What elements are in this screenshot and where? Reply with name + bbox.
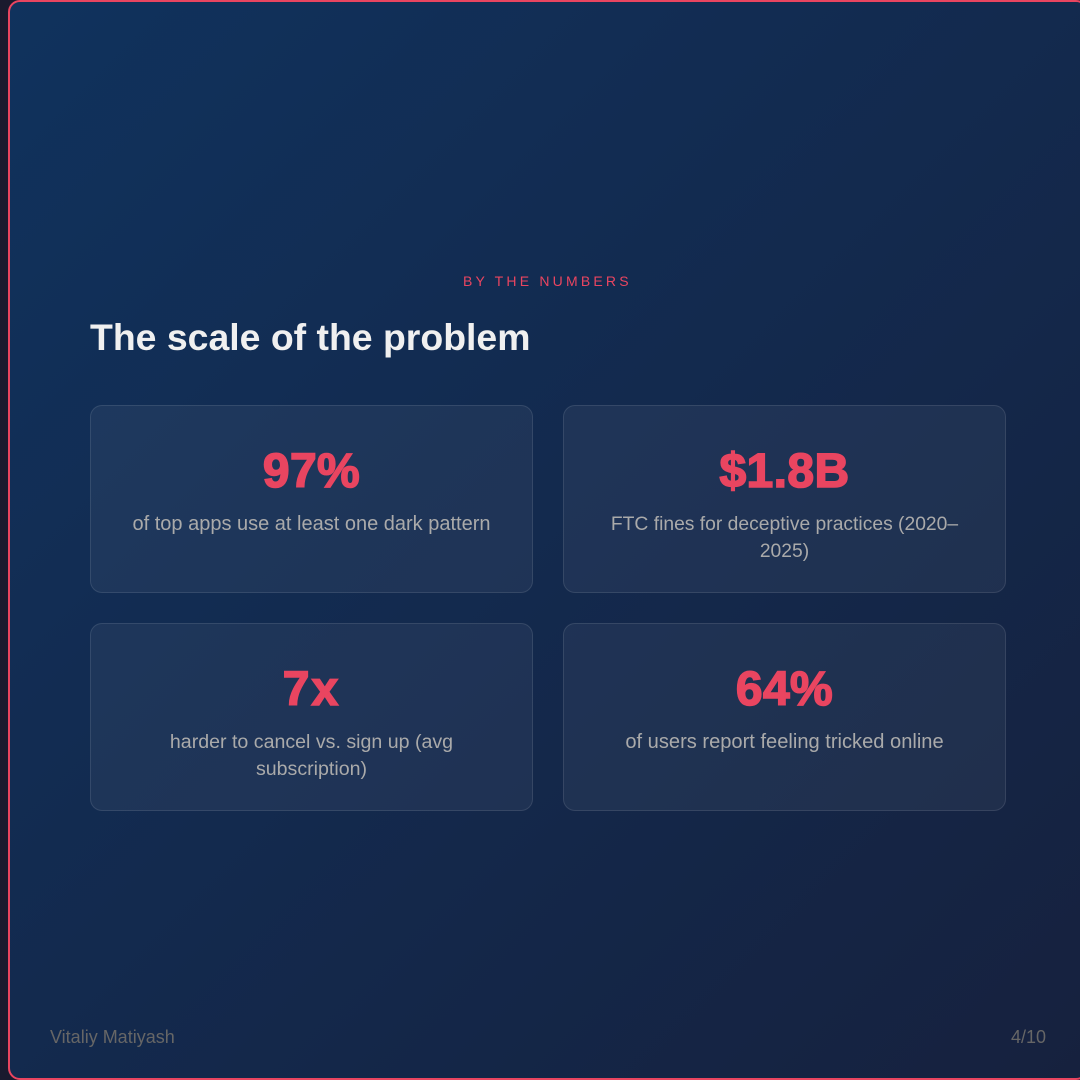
panel: stat 64% xyxy=(563,623,1006,811)
panel: stat $1.8B xyxy=(563,405,1006,593)
panel: stat 7x xyxy=(90,623,533,811)
stat label: harder to cancel: subscription) xyxy=(256,758,367,780)
stat number: 97%: 97% xyxy=(263,445,360,498)
stat label: harder to cancel: harder to cancel vs. sign up (avg xyxy=(170,731,453,753)
stat number: 64%: 64% xyxy=(736,663,833,716)
stat number: 7x: 7x xyxy=(283,663,340,716)
footer: author: Vitaliy Matiyash xyxy=(50,1027,175,1047)
stat label: FTC fines xyxy=(611,514,958,562)
eyebrow: by the numbers: BY THE NUMBERS xyxy=(463,273,632,289)
title: The scale of the problem xyxy=(90,316,530,358)
stat label: harder to cancel xyxy=(170,731,453,780)
stat label: FTC fines: 2025) xyxy=(760,541,809,562)
stat label: FTC fines: FTC fines for deceptive practices (2020– xyxy=(611,514,958,535)
footer: page number: 4/10 xyxy=(1011,1027,1046,1047)
stat label: top apps: of top apps use at least one dark pattern xyxy=(132,513,491,535)
panel: stat 97% xyxy=(90,405,533,593)
stat label: users tricked: of users report feeling tricked online xyxy=(625,731,944,753)
stat number: $1.8B: $1.8B xyxy=(719,445,850,498)
